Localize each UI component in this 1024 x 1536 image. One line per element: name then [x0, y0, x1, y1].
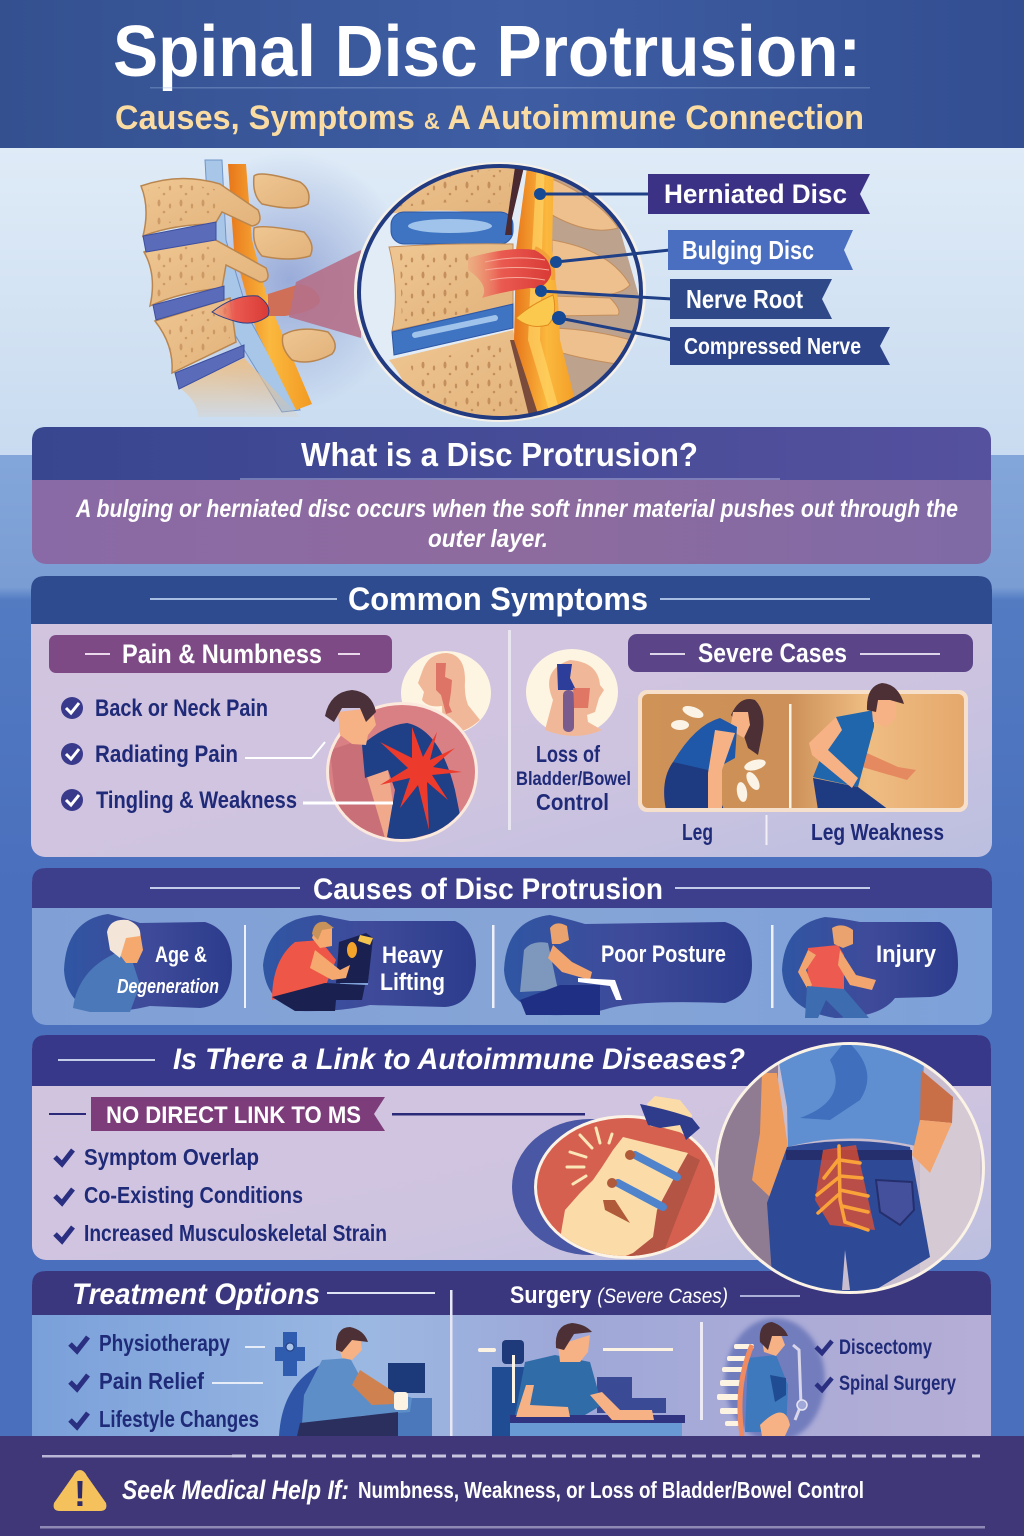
cause: age and degeneration [64, 914, 232, 1012]
symptom checks [61, 695, 297, 814]
leg labels: Leg Weakness [811, 819, 944, 845]
cause: heavy lifting: Heavy [382, 942, 444, 969]
herniated bulge [212, 296, 269, 323]
anatomy illustration: lumbar spine side view [141, 150, 410, 417]
spinal cord [228, 164, 312, 410]
warning text [122, 1475, 864, 1505]
surgery list: Discectomy [839, 1336, 932, 1359]
connection list: Increased Musculoskeletal Strain [84, 1220, 387, 1246]
connection list [55, 1144, 387, 1246]
icon: warning triangle [54, 1470, 106, 1514]
leg labels [682, 815, 944, 845]
symptom checks: Tingling & Weakness [96, 787, 297, 814]
ribbon: NO DIRECT LINK TO MS [106, 1102, 361, 1129]
shirt [775, 1040, 925, 1147]
jeans [767, 1141, 930, 1295]
surgery list [816, 1336, 956, 1395]
connection list: Co-Existing Conditions [84, 1182, 303, 1208]
magnified disc circle [354, 162, 646, 422]
cord [505, 167, 524, 235]
woman bending [664, 699, 763, 810]
posterior bone shapes [552, 179, 630, 364]
label: compressed nerve [670, 327, 890, 365]
symptom checks: Back or Neck Pain [95, 695, 268, 722]
surgery list: Spinal Surgery [839, 1372, 956, 1395]
cause: age and degeneration: Age & [155, 942, 207, 967]
vertebrae [141, 178, 268, 373]
man head [867, 683, 904, 727]
upper disc [391, 212, 513, 244]
severe cases pill: Severe Cases [698, 638, 847, 668]
title banner [0, 0, 1024, 148]
illustration: severe case photo panel [638, 683, 968, 812]
panel: causes of disc protrusion [32, 868, 992, 1025]
man walking [809, 710, 916, 810]
footer warning banner [0, 1436, 1024, 1536]
heading: Treatment Options [72, 1278, 320, 1311]
cause: injury: Injury [876, 941, 937, 968]
subtitle: Causes, Symptoms & A Autoimmune Connection [115, 99, 864, 137]
heading: Is There a Link to Autoimmune Diseases? [173, 1043, 745, 1076]
cause: heavy lifting [263, 915, 476, 1011]
cause: poor posture [504, 915, 752, 1015]
heading: Causes of Disc Protrusion [313, 873, 663, 906]
pain and numbness pill: Pain & Numbness [122, 639, 322, 669]
inflamed process [268, 284, 320, 316]
label: bulging disc [668, 230, 853, 270]
illustration: man with back pain [245, 690, 478, 842]
warning text: Numbness, Weakness, or Loss of Bladder/Bowel Control [358, 1477, 864, 1503]
surgery heading: Surgery (Severe Cases) [510, 1282, 728, 1309]
treatment list: Physiotherapy [99, 1330, 230, 1356]
lower vertebra [389, 330, 528, 416]
cause: heavy lifting: Lifting [380, 969, 445, 996]
protruding disc [468, 249, 551, 298]
illustration: physiotherapy [275, 1327, 432, 1436]
treatment list [70, 1330, 265, 1432]
severe cases pill [628, 634, 973, 672]
panel: what is a disc protrusion [32, 427, 991, 564]
top vertebra [392, 168, 515, 218]
panel: treatment options [32, 1271, 991, 1451]
vertebra texture [148, 185, 230, 365]
glowing spine [815, 1145, 875, 1230]
warning text: Seek Medical Help If: [122, 1475, 349, 1505]
pain and numbness pill [49, 635, 392, 673]
panel: what is a disc protrusion: outer layer. [428, 525, 548, 553]
lower disc [392, 304, 513, 355]
cause: injury [782, 917, 958, 1018]
illustration: surgery table [478, 1323, 685, 1436]
cause: poor posture: Poor Posture [601, 941, 726, 968]
title: Spinal Disc Protrusion: [113, 12, 861, 92]
cause: age and degeneration: Degeneration [117, 976, 219, 998]
treatment list: Lifestyle Changes [99, 1406, 259, 1432]
loss of bladder text: Loss of [536, 741, 600, 767]
label: herniated disc [648, 174, 870, 214]
loss of bladder text [516, 741, 631, 815]
illustration: lower back pain [715, 1040, 985, 1300]
connection list: Symptom Overlap [84, 1144, 259, 1170]
illustration: bladder and bowel head [526, 649, 618, 736]
illustration: head with neck pain [401, 651, 491, 735]
sweat drops [671, 704, 767, 803]
middle vertebra [389, 244, 513, 331]
heading: Common Symptoms [348, 581, 648, 617]
loss of bladder text: Control [536, 789, 609, 815]
illustration: inflamed vertebrae [512, 1096, 718, 1262]
illustration: spinal surgery patient [717, 1318, 825, 1442]
loss of bladder text: Bladder/Bowel [516, 769, 631, 790]
callout lines [534, 188, 672, 340]
label: nerve root: Nerve Root [686, 284, 803, 314]
symptom checks: Radiating Pain [95, 741, 238, 768]
pain burst [380, 727, 462, 830]
zoom wedge [289, 250, 361, 338]
icon: warning triangle: ! [74, 1473, 86, 1514]
label: herniated disc: Herniated Disc [664, 179, 847, 209]
arms [752, 1073, 788, 1197]
leg labels: Leg [682, 819, 713, 845]
panel: autoimmune link [32, 1035, 991, 1300]
treatment list: Pain Relief [99, 1368, 204, 1394]
panel: common symptoms [31, 576, 992, 857]
intervertebral discs [143, 222, 244, 389]
heading: What is a Disc Protrusion? [301, 436, 698, 473]
ribbon [49, 1097, 585, 1131]
label: compressed nerve: Compressed Nerve [684, 333, 861, 359]
label: nerve root [670, 279, 832, 319]
label: bulging disc: Bulging Disc [682, 235, 814, 265]
spinous processes [254, 174, 335, 362]
